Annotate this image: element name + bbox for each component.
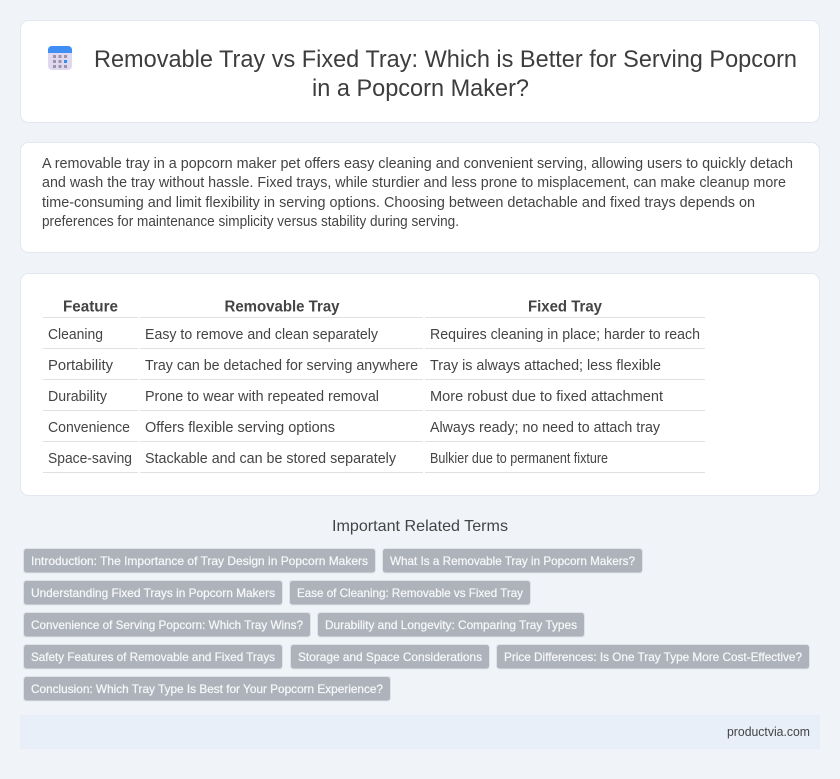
text block: intro: preferences for maintenance simplicity versus stability during serving. xyxy=(42,214,459,230)
title xyxy=(94,46,797,102)
related term chips xyxy=(24,548,810,701)
table header: Feature xyxy=(63,298,118,316)
table rows: Durability xyxy=(48,389,108,405)
table rows: Tray is always attached; less flexible xyxy=(430,358,661,374)
related term chips: What Is a Removable Tray in Popcorn Makers? xyxy=(390,554,635,568)
text block: intro: A removable tray in a popcorn maker pet offers easy cleaning and convenient serving, allowing users to quickly detach xyxy=(42,156,793,172)
related term chips: Price Differences: Is One Tray Type More Cost-Effective? xyxy=(504,650,802,664)
text block: intro: and wash the tray without hassle. Fixed trays, while sturdier and less prone to misplacement, can make cleanup more xyxy=(42,175,786,191)
table rows: Prone to wear with repeated removal xyxy=(145,389,379,405)
table rows: Offers flexible serving options xyxy=(145,420,335,436)
table rows: Cleaning xyxy=(48,327,103,343)
related term chips: Durability and Longevity: Comparing Tray Types xyxy=(325,618,577,632)
related term chips: Safety Features of Removable and Fixed Trays xyxy=(31,650,275,664)
related term chips: Convenience of Serving Popcorn: Which Tray Wins? xyxy=(31,618,303,632)
panel: comparison table xyxy=(20,274,820,496)
related term chips: Understanding Fixed Trays in Popcorn Makers xyxy=(31,586,275,600)
table rows: Always ready; no need to attach tray xyxy=(430,420,661,436)
related term chips: Ease of Cleaning: Removable vs Fixed Tray xyxy=(297,586,523,600)
footer xyxy=(20,715,820,749)
panel: header xyxy=(20,20,820,122)
table rows xyxy=(48,327,700,467)
text block: intro: time-consuming and limit flexibility in serving options. Choosing between detachable and fixed trays depends on xyxy=(42,195,755,211)
table rows: Requires cleaning in place; harder to reach xyxy=(430,327,700,343)
table rows: More robust due to fixed attachment xyxy=(430,389,663,405)
panel: intro paragraph xyxy=(20,142,820,252)
table rows: Portability xyxy=(48,358,114,374)
title: Removable Tray vs Fixed Tray: Which is Better for Serving Popcorn xyxy=(94,46,797,73)
related term chips: Storage and Space Considerations xyxy=(298,650,482,664)
related term chips: Conclusion: Which Tray Type Is Best for Your Popcorn Experience? xyxy=(31,682,383,696)
heading: related terms: Important Related Terms xyxy=(332,518,508,535)
table header xyxy=(63,298,602,316)
icon: calendar xyxy=(48,46,72,70)
table rows: Easy to remove and clean separately xyxy=(145,327,379,343)
table header: Removable Tray xyxy=(224,298,340,316)
table rows: Convenience xyxy=(48,420,130,436)
footer: productvia.com xyxy=(727,725,810,739)
related term chips: Introduction: The Importance of Tray Design in Popcorn Makers xyxy=(31,554,368,568)
table rows: Bulkier due to permanent fixture xyxy=(430,451,608,467)
table rows: Space-saving xyxy=(48,451,132,467)
table header: Fixed Tray xyxy=(528,298,602,316)
table rows: Tray can be detached for serving anywhere xyxy=(145,358,418,374)
text block: intro xyxy=(42,156,793,230)
title: in a Popcorn Maker? xyxy=(312,75,529,102)
table rows: Stackable and can be stored separately xyxy=(145,451,397,467)
